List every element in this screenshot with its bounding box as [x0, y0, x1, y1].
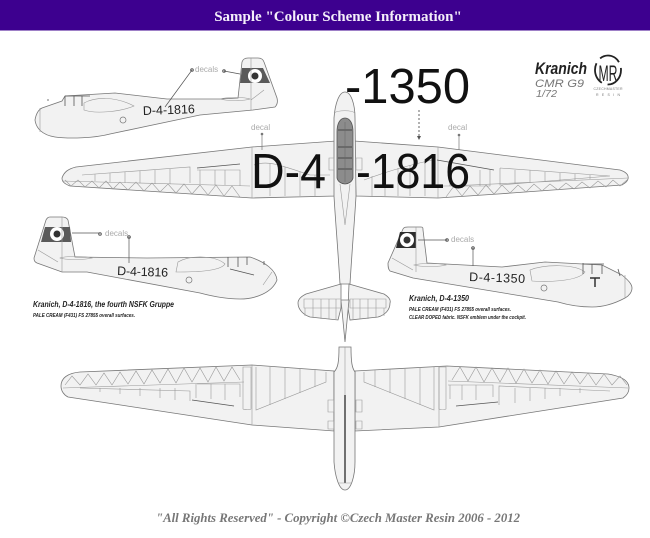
- decals callout: decals: [105, 229, 128, 238]
- right wing underside: [355, 366, 629, 431]
- caption: D-4-1350: CLEAR DOPED fabric. NSFK emblem under the cockpit.: [409, 315, 526, 321]
- caption: D-4-1350: Kranich, D-4-1350: [409, 294, 469, 303]
- fuselage code: D-4-1350: [469, 270, 525, 286]
- CMR maker logo: [594, 56, 623, 97]
- kit title logo: 1/72: [536, 89, 557, 100]
- cockpit canopy: [337, 118, 353, 184]
- large wing registration left part: D-4: [251, 145, 326, 199]
- side view: D-4-1816 lower: [34, 217, 277, 299]
- CMR maker logo: RESIN: [596, 93, 620, 97]
- bottom view glider: [61, 347, 629, 490]
- decals callout: decals: [195, 65, 218, 74]
- callout: decal right wing: decal: [448, 123, 467, 132]
- fuselage code: D-4-1816: [143, 102, 195, 118]
- tail band: [396, 232, 416, 248]
- tail emblem disc: [400, 233, 414, 247]
- left wing underside: [61, 365, 334, 431]
- fuselage: [334, 92, 356, 284]
- callout: decal left wing: [251, 123, 270, 150]
- tail emblem disc: [50, 227, 64, 241]
- large wing registration right part: -1816: [356, 145, 470, 199]
- fuselage code: D-4-1816: [117, 264, 168, 280]
- caption: D-4-1350: [409, 294, 526, 321]
- side view: D-4-1350: [388, 227, 632, 307]
- decals callout: decals: [451, 235, 474, 244]
- caption: D-4-1350: PALE CREAM (F431) FS 27855 overall surfaces.: [409, 307, 511, 313]
- decals callout: [72, 229, 130, 263]
- left wing plan: [62, 141, 336, 198]
- CMR maker logo: CZECHMASTER: [594, 87, 623, 91]
- side view: D-4-1816 upper: [35, 58, 277, 138]
- kit title logo: [535, 59, 587, 100]
- kit title logo: Kranich: [535, 59, 587, 78]
- tail band: [41, 227, 71, 242]
- top view glider: [62, 92, 628, 342]
- tail emblem disc: [248, 69, 262, 83]
- dashed arrow from registration: [417, 110, 421, 140]
- tail band: [240, 68, 270, 83]
- copyright footer: "All Rights Reserved" - Copyright ©Czech Master Resin 2006 - 2012: [156, 510, 520, 525]
- right wing plan: [354, 141, 628, 198]
- CMR maker logo: MR: [598, 61, 618, 86]
- callout: decal left wing: decal: [251, 123, 270, 132]
- decals callout: [165, 65, 240, 107]
- caption: D-4-1816: [33, 300, 174, 319]
- caption: D-4-1816: Kranich, D-4-1816, the fourth NSFK Gruppe: [33, 300, 174, 309]
- large registration number: -1350: [345, 60, 470, 114]
- header title: Sample "Colour Scheme Information": [214, 9, 462, 25]
- fuselage underside: [328, 347, 362, 490]
- callout: decal right wing: [448, 123, 467, 150]
- kit title logo: CMR G9: [535, 78, 584, 90]
- tailplane: [298, 284, 390, 342]
- caption: D-4-1816: PALE CREAM (F431) FS 27855 overall surfaces.: [33, 313, 135, 319]
- header band: [0, 0, 650, 30]
- decals callout: [418, 235, 474, 266]
